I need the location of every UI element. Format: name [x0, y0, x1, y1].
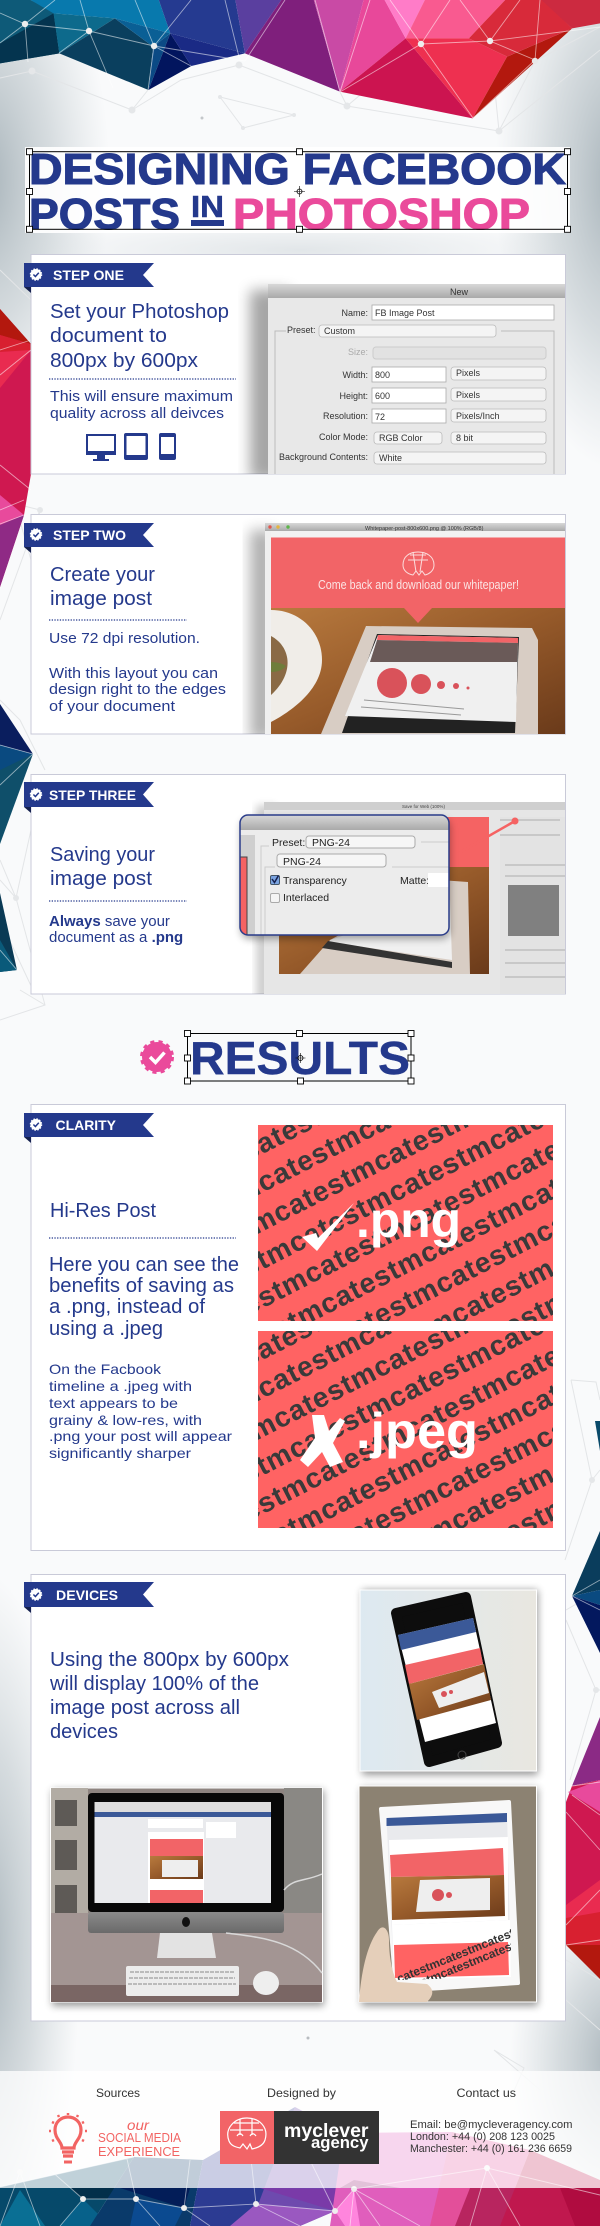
logo text: our social media experience: our	[127, 2117, 150, 2133]
right side polygons	[566, 1421, 600, 1979]
logo: myclever agency	[220, 2111, 379, 2164]
screenshot: new document dialog: Preset:	[287, 325, 316, 335]
callout: png-24 settings: Interlaced	[283, 892, 329, 904]
title	[25, 145, 570, 239]
contact details	[410, 2119, 572, 2155]
callout: png-24 settings: Preset:	[272, 837, 305, 849]
ribbon: clarity: CLARITY	[56, 1117, 117, 1133]
body text: step three: document as a .png	[49, 929, 183, 946]
logo: myclever agency: myclever	[284, 2121, 369, 2142]
selection frame	[26, 149, 570, 232]
title word: photoshop: PHOTOSHOP	[233, 190, 530, 239]
post headline: Come back and download our whitepaper!	[318, 578, 519, 592]
screenshot: new document dialog: 600	[375, 391, 390, 401]
screenshot: new document dialog	[250, 284, 568, 480]
screenshot: save for web: Save for Web (100%)	[402, 804, 445, 809]
heading: step one: Set your Photoshop	[50, 301, 229, 323]
heading: hi-res post: Hi-Res Post	[50, 1200, 156, 1222]
contact details: Manchester: +44 (0) 161 236 6659	[410, 2143, 572, 2155]
heading: step one: document to	[50, 325, 167, 347]
body text: clarity: text appears to be	[49, 1395, 178, 1411]
screenshot: new document dialog: Resolution:	[323, 411, 368, 421]
selection frame	[184, 1030, 414, 1084]
body text: clarity: On the Facbook	[49, 1361, 162, 1377]
footer heading: contact us: Contact us	[456, 2086, 516, 2100]
ribbon: step one	[24, 263, 154, 293]
contact details: Email: be@mycleveragency.com	[410, 2119, 572, 2131]
ribbon: step two: STEP TWO	[53, 527, 126, 543]
logo text: our social media experience: EXPERIENCE	[98, 2145, 180, 2159]
screenshot: new document dialog: Custom	[324, 326, 355, 336]
body text: step one: This will ensure maximum	[50, 388, 233, 405]
ribbon: clarity	[24, 1113, 154, 1143]
screenshot: new document dialog: Pixels	[456, 368, 481, 378]
results text: RESULTS	[190, 1032, 410, 1084]
heading: devices: devices	[50, 1721, 118, 1743]
body text: step two: of your document	[49, 698, 176, 715]
heading: devices: will display 100% of the	[49, 1673, 259, 1695]
body text: step one	[50, 388, 233, 422]
screenshot: new document dialog: 8 bit	[456, 433, 474, 443]
heading: devices: image post across all	[50, 1697, 240, 1719]
photo: tablet	[359, 1786, 550, 2006]
body text: step two: With this layout you can	[49, 665, 218, 682]
heading: step two: image post	[50, 588, 152, 610]
footer heading: sources: Sources	[96, 2086, 140, 2100]
heading: step three: Saving your	[50, 844, 155, 866]
ribbon: step two	[24, 523, 154, 553]
icon: brain	[403, 552, 434, 575]
intro text: clarity	[49, 1254, 239, 1340]
screenshot: new document dialog: 72	[375, 412, 385, 422]
intro text: clarity: benefits of saving as	[49, 1275, 234, 1297]
screenshot: image post in photoshop	[250, 523, 565, 740]
panel: step three	[24, 774, 566, 1000]
footer band	[0, 2071, 600, 2188]
ribbon: step one: STEP ONE	[53, 267, 124, 283]
body text: step two: design right to the edges	[49, 681, 226, 698]
results heading	[142, 1030, 414, 1084]
heading: devices	[49, 1649, 289, 1743]
bottom polygon banner	[0, 2107, 600, 2226]
body text: step two: Use 72 dpi resolution.	[49, 630, 200, 647]
panel: clarity	[24, 1104, 566, 1551]
screenshot: new document dialog: Pixels/Inch	[456, 411, 500, 421]
heading: step two	[50, 564, 155, 610]
logo text: our social media experience: SOCIAL MEDIA	[98, 2131, 182, 2145]
footer heading: designed by: Designed by	[267, 2086, 336, 2100]
screenshot: image post in photoshop: Whitepaper-post-800x600.png @ 100% (RGB/8)	[365, 526, 484, 532]
tablet mockup	[321, 626, 538, 734]
intro text: clarity: a .png, instead of	[49, 1296, 205, 1318]
body text: step three: Always save your	[49, 913, 170, 930]
image: jpeg example: .jpeg	[356, 1403, 478, 1459]
title word: in: IN	[191, 189, 224, 224]
heading: step one: 800px by 600px	[50, 350, 198, 372]
screenshot: new document dialog: 800	[375, 370, 390, 380]
heading: devices: Using the 800px by 600px	[50, 1649, 289, 1671]
contact details: London: +44 (0) 208 123 0025	[410, 2131, 555, 2143]
photo: tablet: catestmcatestmcatestmcate	[395, 1913, 549, 1986]
callout: png-24 settings: PNG-24	[312, 837, 350, 849]
heading: step two: Create your	[50, 564, 155, 586]
image: png example: .png	[356, 1192, 461, 1248]
screenshot: new document dialog: Pixels	[456, 390, 481, 400]
body text: clarity: timeline a .jpeg with	[49, 1378, 192, 1394]
ribbon: devices	[24, 1582, 154, 1613]
photo: tablet: catestmcatestmcatestmcate	[396, 1925, 550, 1998]
callout: png-24 settings: PNG-24	[283, 856, 321, 868]
icon: pink check badge	[142, 1042, 172, 1072]
screenshot: save for web	[256, 802, 565, 1000]
logo text: our social media experience	[98, 2117, 182, 2159]
screenshot: new document dialog: RGB Color	[379, 433, 423, 443]
body text: step one: quality across all deivces	[50, 405, 224, 422]
image: png example	[258, 1125, 553, 1321]
intro text: clarity: Here you can see the	[49, 1254, 239, 1276]
ribbon: devices: DEVICES	[56, 1587, 118, 1603]
panel: devices	[24, 1574, 566, 2021]
heading: step three: image post	[50, 868, 152, 890]
body text: step three	[49, 913, 183, 946]
photo: phone	[360, 1590, 538, 1775]
body text: clarity: grainy & low-res, with	[49, 1412, 202, 1428]
left side polygons	[0, 309, 33, 972]
screenshot: new document dialog: Color Mode:	[319, 432, 368, 442]
callout: png-24 settings: Matte:	[400, 875, 429, 887]
screenshot: new document dialog: Name:	[341, 308, 368, 318]
title line one: DESIGNING FACEBOOK	[29, 145, 566, 194]
logo: myclever agency: agency	[311, 2133, 369, 2152]
icon: light bulb	[49, 2113, 87, 2162]
screenshot: new document dialog: Size:	[348, 347, 368, 357]
screenshot: new document dialog: New	[450, 287, 469, 297]
panel: step one	[24, 254, 568, 480]
intro text: clarity: using a .jpeg	[49, 1318, 163, 1340]
title word: posts: POSTS	[29, 190, 180, 239]
heading: step three	[50, 844, 155, 890]
photo: desktop	[50, 1788, 324, 2006]
screenshot: new document dialog: Width:	[342, 370, 368, 380]
top polygon banner	[0, 0, 600, 118]
screenshot: new document dialog: Height:	[339, 391, 368, 401]
body text: clarity: .png your post will appear	[49, 1428, 232, 1444]
screenshot: new document dialog: White	[379, 453, 402, 463]
screenshot: new document dialog: Background Contents:	[279, 452, 368, 462]
icons: devices	[86, 433, 176, 461]
screenshot: new document dialog: FB Image Post	[375, 308, 435, 318]
body text: step two	[49, 630, 226, 715]
body text: clarity	[49, 1361, 232, 1461]
ribbon: step three	[24, 782, 154, 813]
body text: clarity: significantly sharper	[49, 1445, 191, 1461]
panel: step two	[24, 514, 566, 740]
image: jpeg example	[258, 1331, 553, 1528]
ribbon: step three: STEP THREE	[49, 787, 136, 803]
callout: png-24 settings	[240, 815, 452, 939]
callout: png-24 settings: Transparency	[283, 875, 348, 887]
heading: step one	[50, 301, 229, 372]
